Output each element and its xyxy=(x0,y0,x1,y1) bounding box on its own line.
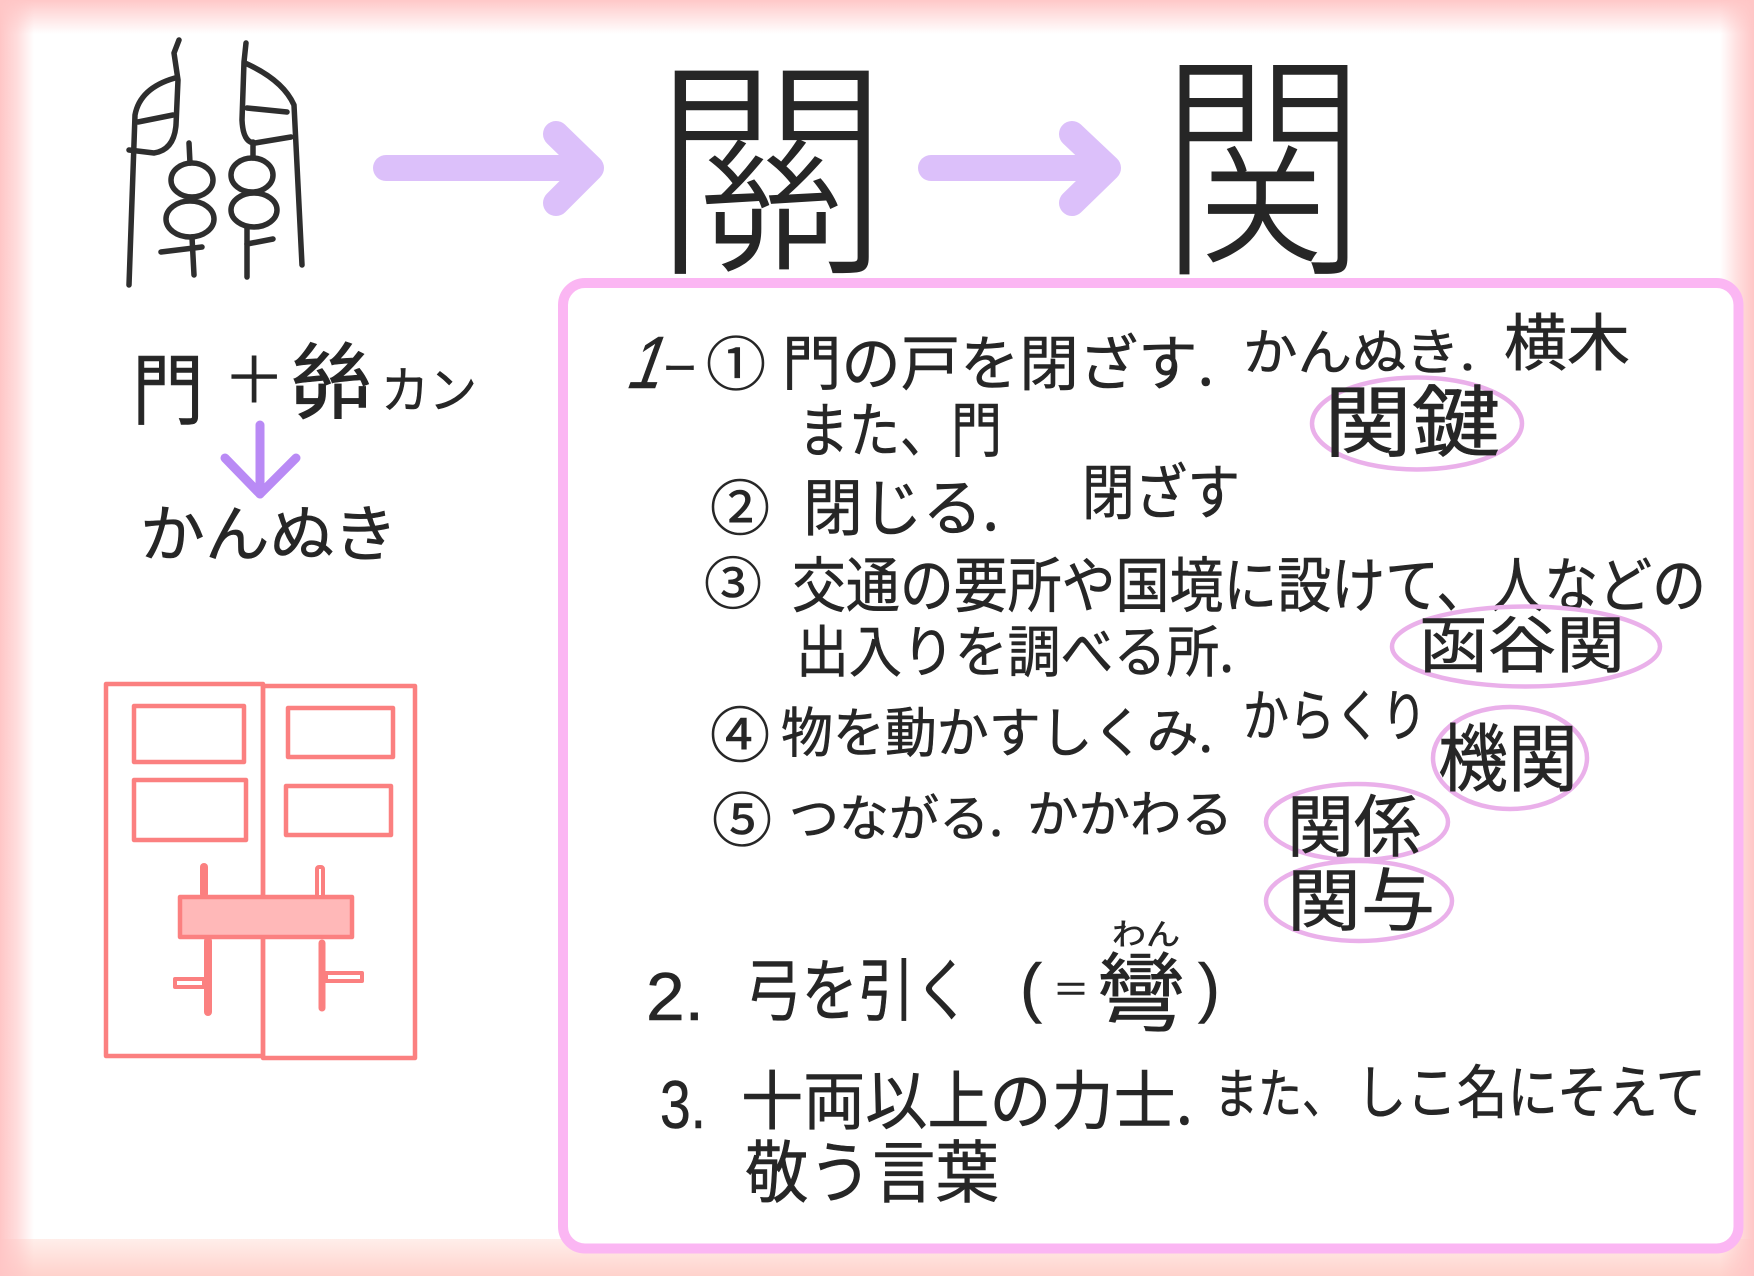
panel: meanings xyxy=(563,283,1738,1248)
arrow: old form to modern form xyxy=(931,134,1108,203)
meaning 1-2: ② xyxy=(710,461,770,548)
meaning 3: 十両以上の力士. xyxy=(741,1051,1193,1143)
door: right leaf xyxy=(263,686,415,1058)
meaning 3: 敬う言葉 xyxy=(745,1118,999,1217)
meaning 2: = xyxy=(1056,961,1086,1013)
meaning 1-2: 閉じる. xyxy=(803,458,999,548)
meaning 2: ) xyxy=(1198,950,1220,1024)
meaning 2: 弓を引く xyxy=(745,936,971,1035)
illustration: double door with crossbar xyxy=(106,684,415,1058)
callout: 函谷関 xyxy=(1392,595,1660,686)
meaning 2: ( xyxy=(1020,950,1042,1024)
meaning 3: しこ名にそえて xyxy=(1356,1046,1706,1130)
meaning 1-1: また、門 xyxy=(798,383,1002,470)
meaning 1-5: ⑤ xyxy=(712,774,772,858)
meaning 3 xyxy=(660,1046,1706,1217)
meaning 2: わん xyxy=(1112,910,1180,954)
callout: 函谷関: 函谷関 xyxy=(1419,595,1625,685)
meaning 1-4 xyxy=(710,672,1427,775)
meaning 1-1: ー xyxy=(663,337,697,395)
arrow: pictograph to old form xyxy=(386,134,591,203)
meaning 1-1: 門の戸を閉ざす. xyxy=(782,316,1214,403)
meaning 1-1: 横木 xyxy=(1504,293,1630,383)
arrow: down to meaning xyxy=(225,425,296,494)
meaning 1-5 xyxy=(712,774,1233,858)
door: left leaf xyxy=(106,684,263,1056)
brackets: bolt holders xyxy=(175,867,362,1012)
callout: 機関: 機関 xyxy=(1438,700,1578,807)
callout: 関与: 関与 xyxy=(1287,846,1435,945)
meaning 1-1 xyxy=(618,293,1630,470)
meaning 1-1: ① xyxy=(706,318,766,402)
meaning 1-3: 出入りを調べる所. xyxy=(796,608,1234,689)
text block: character composition: 十 xyxy=(229,341,279,413)
meaning 1-5: かかわる xyxy=(1027,775,1233,847)
meaning 2 xyxy=(646,910,1220,1049)
text: kannuki: かんぬき xyxy=(140,484,398,574)
meaning 1-5: つながる. xyxy=(789,779,1003,851)
callout: 関鍵: 関鍵 xyxy=(1324,361,1500,473)
meaning 2: 彎 xyxy=(1097,924,1185,1049)
text block: character composition xyxy=(132,316,477,441)
meaning 1-3 xyxy=(704,538,1706,689)
meaning 1-4: からくり xyxy=(1243,672,1427,753)
meaning 3: また、 xyxy=(1214,1050,1346,1129)
callout: 関係: 関係 xyxy=(1287,772,1421,871)
meaning 2: 2. xyxy=(646,959,704,1035)
meaning 1-4: ④ xyxy=(710,688,770,775)
text block: character composition: 𢇇 xyxy=(286,316,376,437)
meaning 1-3: ③ xyxy=(704,540,762,621)
meaning 1-1: 1 xyxy=(618,322,682,404)
meaning 3: 3. xyxy=(660,1067,706,1143)
meaning 1-2 xyxy=(710,445,1240,548)
icon: ancient pictograph of a barred gate xyxy=(129,40,302,285)
text block: character composition: 門 xyxy=(132,329,204,441)
meaning 1-4: 物を動かすしくみ. xyxy=(781,689,1213,768)
meaning 1-1: かんぬき. xyxy=(1243,313,1475,385)
crossbar: wooden bolt xyxy=(180,897,352,937)
text block: character composition: カン xyxy=(381,351,477,423)
meaning 1-2: 閉ざす xyxy=(1082,445,1240,532)
